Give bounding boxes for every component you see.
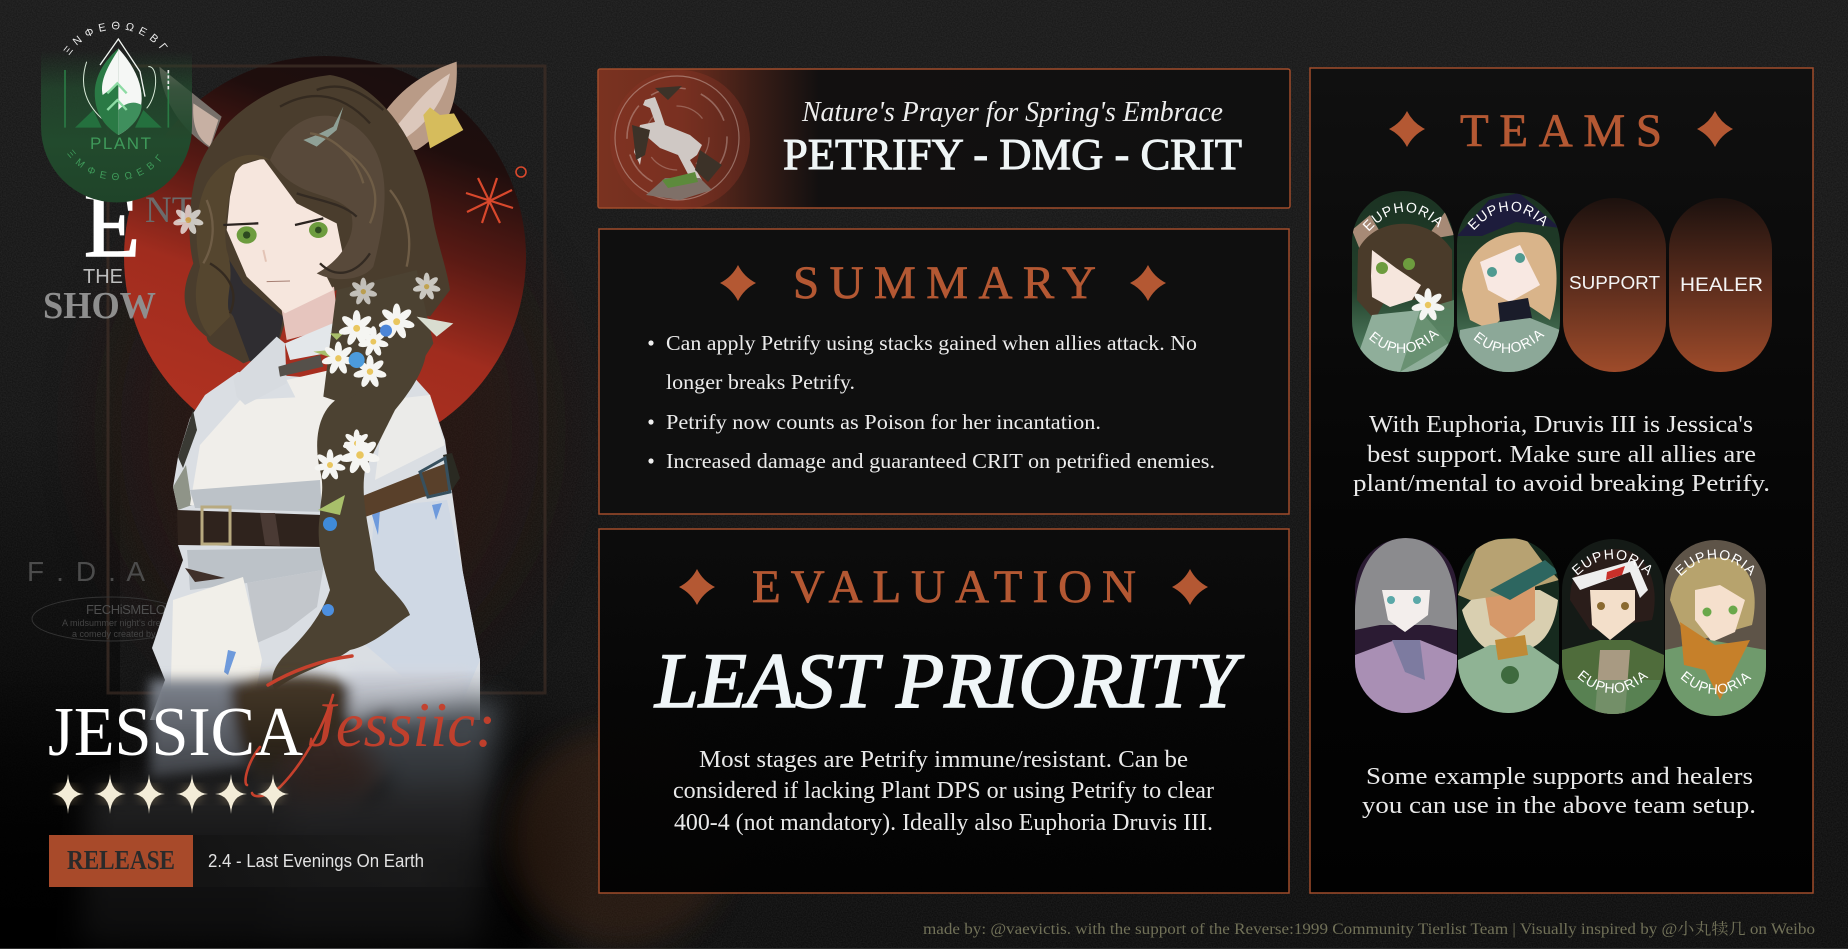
neck: [282, 287, 338, 340]
heading: evaluation: EVALUATION: [752, 561, 1136, 613]
bullet list: Can apply Petrify using stacks gained when allies attack. No: [666, 331, 1197, 355]
hair strands: [203, 87, 409, 313]
panel: evaluation: LEAST PRIORITY: [654, 637, 1245, 724]
evaluation text: Most stages are Petrify immune/resistant. Can be: [699, 747, 1188, 773]
portrait: bow support: EUPHORIA: [1675, 549, 1754, 576]
heading: teams: [1389, 105, 1733, 157]
blouse: [150, 372, 480, 720]
text: team note: best support. Make sure all allies are: [1367, 442, 1756, 468]
slot: support: [1563, 198, 1666, 372]
heading: summary: [720, 257, 1166, 309]
portrait: hat support: [1458, 538, 1559, 713]
braid: [272, 335, 426, 690]
portrait: bow support: EUPHORIA: [1680, 671, 1752, 694]
ears: [159, 67, 222, 148]
evaluation text: considered if lacking Plant DPS or using Petrify to clear: [673, 778, 1214, 804]
hair tail behind flowers: [323, 270, 433, 403]
panel: evaluation: [599, 529, 1289, 893]
portrait: silver-haired support: [1355, 538, 1457, 713]
face: [227, 158, 343, 313]
portrait: glasses support: EUPHORIA: [1572, 549, 1652, 576]
lower flowers: [314, 435, 380, 616]
text: team note: [1353, 412, 1770, 497]
decorative show lettering: a comedy created by: [72, 629, 156, 639]
text: team note: plant/mental to avoid breaking Petrify.: [1353, 471, 1770, 497]
decorative show lettering: F . D . A: [27, 556, 145, 587]
portrait: glasses support: EUPHORIA: [1578, 670, 1648, 694]
heading: teams: TEAMS: [1460, 105, 1662, 157]
character illustration: [150, 62, 480, 720]
portrait: Druvis III: EUPHORIA: [1468, 201, 1546, 230]
decorative show lettering: NT: [145, 190, 194, 231]
heading: summary: SUMMARY: [793, 257, 1096, 309]
bullet list: longer breaks Petrify.: [666, 370, 855, 394]
bangs: [270, 116, 385, 279]
panel: teams: [1309, 67, 1814, 894]
panel: title banner: PETRIFY - DMG - CRIT: [783, 130, 1242, 179]
decorative show lettering: THE: [83, 266, 123, 288]
character name: JESSICA: [48, 694, 303, 771]
collar: [233, 337, 287, 405]
panel: title banner: [598, 69, 1290, 210]
logo: plant element badge: [41, 22, 192, 202]
evaluation text: [673, 747, 1214, 836]
waist belt: [177, 507, 323, 547]
bullet list: Increased damage and guaranteed CRIT on petrified enemies.: [666, 449, 1215, 473]
decorative show lettering: SHOW: [43, 285, 156, 327]
decorative show lettering: FECHiSMELO: [86, 602, 166, 617]
icon: leaping deer statue: [610, 70, 750, 210]
slot: healer: [1669, 198, 1772, 372]
portrait: glasses support: [1562, 539, 1664, 714]
footer credit: made by: @vaevictis. with the support of the Reverse:1999 Community Tierlist Team | Visually inspired by @小丸犊几 on Weibo: [923, 920, 1815, 938]
text: examples note: [1362, 764, 1756, 819]
portrait: bow support: [1665, 540, 1766, 716]
release bar: RELEASE: [67, 845, 175, 875]
logo: plant element badge: ΞΝΦΕΘΩΕΒΓ: [63, 22, 168, 56]
panel: title banner: Nature's Prayer for Spring's Embrace: [801, 97, 1223, 128]
arm belt: [360, 453, 460, 518]
blurred lower body under the title: [84, 666, 718, 949]
left art: backdrop circle and frame: [108, 56, 545, 693]
flowers: [173, 205, 453, 457]
slot: healer: HEALER: [1680, 275, 1763, 296]
portrait: Jessica: EUPHORIA: [1369, 330, 1440, 353]
portrait: Jessica: EUPHORIA: [1362, 202, 1442, 232]
logo: plant element badge: ΞΜΦΕΘΩΕΒΓ: [67, 150, 161, 180]
decorative show lettering: [27, 174, 194, 641]
evaluation text: 400-4 (not mandatory). Ideally also Euphoria Druvis III.: [674, 810, 1213, 836]
signature: [246, 656, 496, 796]
text: examples note: you can use in the above team setup.: [1362, 793, 1756, 819]
panel: summary: [599, 229, 1289, 514]
bullet list: [648, 331, 1215, 473]
head (scaled group): [159, 62, 463, 457]
portrait: Druvis III: [1457, 193, 1560, 372]
slot: support: SUPPORT: [1569, 273, 1660, 293]
icon: red asterisk and ring: [466, 167, 526, 223]
logo: plant element badge: PLANT: [90, 134, 151, 153]
release bar: [49, 835, 493, 887]
release bar: 2.4 - Last Evenings On Earth: [208, 851, 424, 871]
portrait: Druvis III: EUPHORIA: [1474, 330, 1544, 353]
portrait: Jessica: [1352, 191, 1454, 372]
signature: Jessiic:: [308, 689, 496, 760]
decorative show lettering: A midsummer night's dre: [62, 618, 161, 628]
bullet list: Petrify now counts as Poison for her incantation.: [666, 410, 1101, 434]
eyes and mouth: [237, 226, 257, 244]
text: team note: With Euphoria, Druvis III is Jessica's: [1369, 412, 1753, 438]
back hair: [185, 75, 450, 363]
decorative show lettering: E: [84, 174, 140, 276]
rarity stars: [52, 774, 289, 814]
text: examples note: Some example supports and healers: [1366, 764, 1753, 790]
